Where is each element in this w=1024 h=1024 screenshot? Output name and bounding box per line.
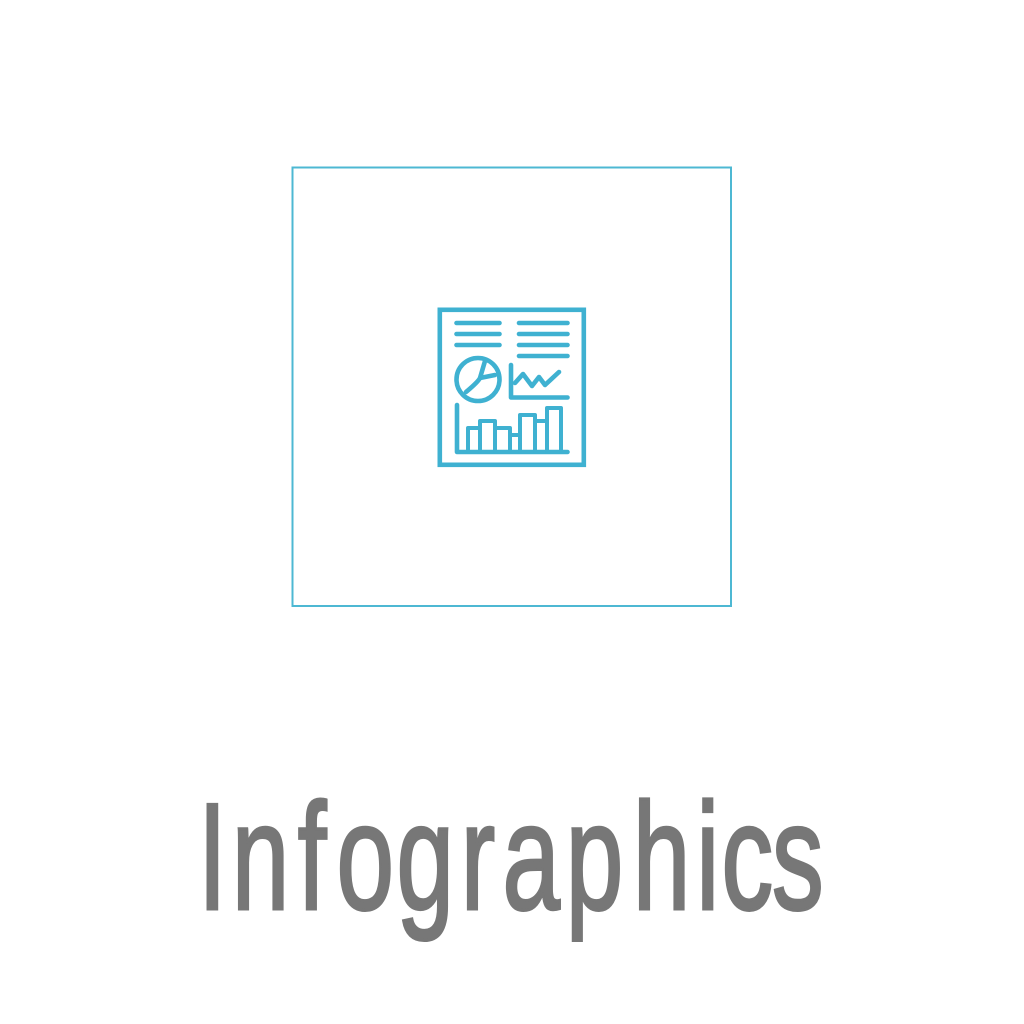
panel: square frame	[292, 168, 731, 606]
icon: infographic document	[440, 310, 584, 465]
icon: page outline	[440, 310, 584, 465]
icon: left text lines	[456, 323, 500, 345]
icon: bar chart	[457, 405, 568, 452]
icon: pie chart	[456, 358, 500, 401]
icon: line chart	[511, 365, 568, 398]
icon: right text lines	[519, 323, 568, 356]
title: Infographics	[198, 771, 824, 942]
